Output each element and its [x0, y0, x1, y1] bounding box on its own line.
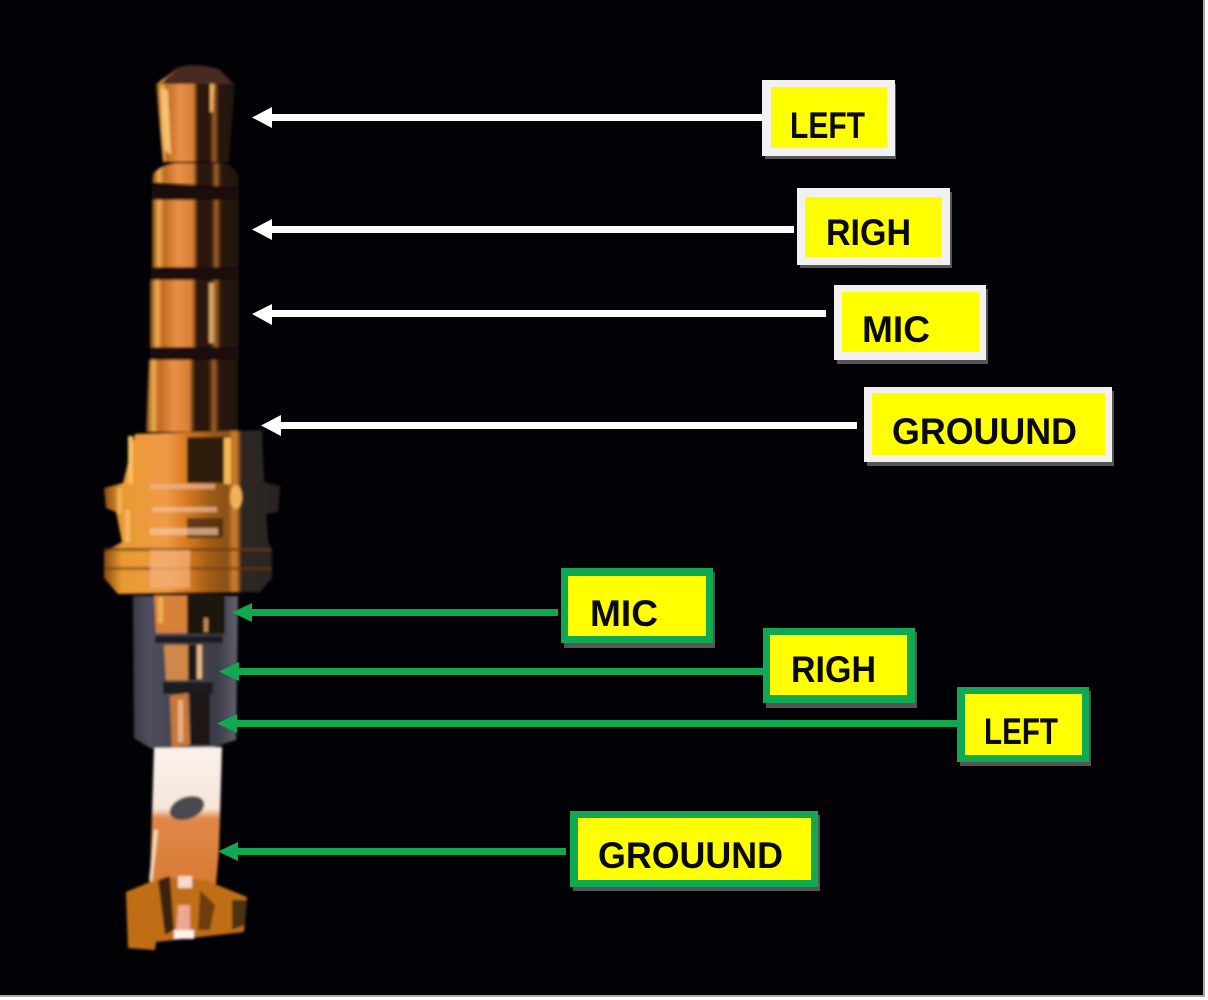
gray plastic insulator	[133, 596, 238, 748]
arrow: mic ring	[252, 304, 826, 325]
label: LEFT (front)	[762, 80, 896, 159]
label: GROUUND (rear): GROUUND	[598, 835, 783, 876]
label: RIGH (rear): RIGH	[791, 649, 876, 690]
label: GROUUND (front): GROUUND	[892, 411, 1077, 452]
label: RIGH (front)	[797, 188, 952, 268]
label: GROUUND (front)	[864, 387, 1114, 466]
insulating ring 3	[150, 347, 239, 360]
jack ring (mic)	[150, 280, 239, 347]
arrow: rear right	[219, 662, 763, 681]
arrow: ground sleeve	[261, 415, 857, 436]
arrow: rear mic	[232, 603, 558, 622]
label: LEFT (rear)	[957, 687, 1091, 766]
solder lug	[126, 747, 247, 950]
label: MIC (rear): MIC	[590, 593, 658, 634]
rear contact: mic	[154, 595, 225, 643]
jack ring (right)	[152, 200, 239, 267]
rear contact: right	[163, 645, 213, 694]
insulating ring 1	[152, 186, 239, 200]
arrow: rear left	[217, 714, 958, 733]
label: MIC (rear)	[561, 568, 715, 648]
label: RIGH (front): RIGH	[826, 212, 911, 253]
label: MIC (front)	[834, 285, 988, 364]
arrow: left tip	[252, 107, 762, 128]
insulating ring 2	[151, 267, 239, 280]
label: GROUUND (rear)	[570, 811, 820, 891]
rear contact: left	[170, 693, 210, 748]
jack sleeve (ground)	[146, 360, 238, 432]
label: LEFT (front): LEFT	[790, 105, 865, 146]
photo of 4-pole audio jack	[104, 65, 280, 950]
threaded gold base	[104, 430, 280, 594]
jack tip (left)	[152, 65, 239, 187]
label: RIGH (rear)	[763, 628, 917, 708]
label: LEFT (rear): LEFT	[984, 711, 1058, 752]
label: MIC (front): MIC	[862, 309, 930, 350]
arrow: rear ground	[218, 842, 566, 861]
arrow: right ring	[252, 219, 794, 240]
